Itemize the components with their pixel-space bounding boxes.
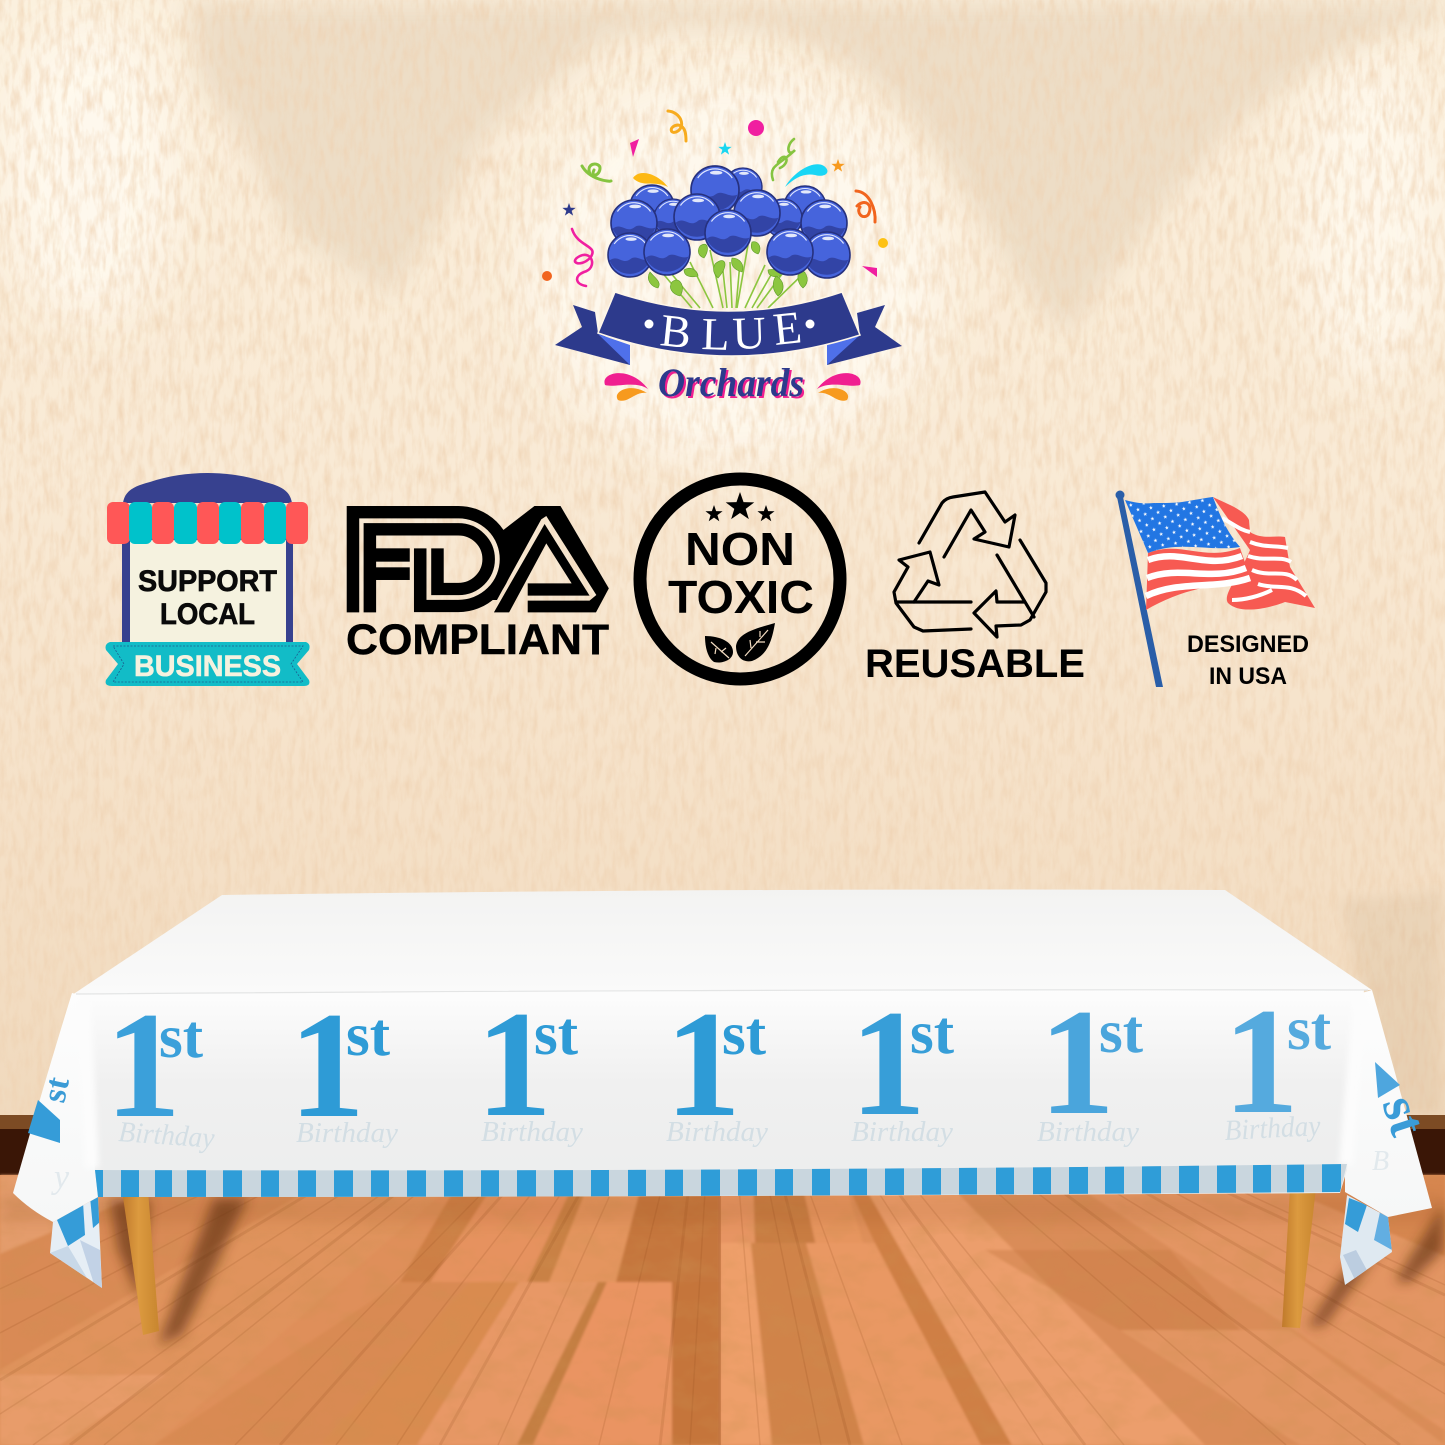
cloth corner underside left [50,1197,102,1288]
FDA logo [353,506,609,612]
store body [122,530,293,650]
Birthday script labels: Birthday [296,1117,398,1149]
floor wood grain [0,1175,1445,1445]
wooden floor [0,1175,1445,1445]
right side cloth print: st [1371,1089,1437,1143]
business ribbon [106,642,310,686]
designed text [1187,631,1309,690]
Orchards script: Orchards [658,360,804,405]
right side cloth print [1371,1062,1437,1177]
left side cloth print [28,1073,77,1196]
badge: support local business [106,473,310,686]
print 4: st [722,1001,767,1068]
1st Birthday prints [105,977,1332,1149]
flag pole [1116,490,1163,687]
print 7 [1223,977,1332,1145]
table top surface [72,890,1372,995]
print 3: st [534,1001,579,1068]
table leg left [122,1190,159,1335]
leaves [705,623,775,663]
flag front stripes [1146,548,1252,610]
ribbon banner: BLUE [658,301,804,360]
badge: non toxic [640,479,840,679]
flag back section [1213,497,1315,610]
Birthday script labels: Birthday [851,1116,953,1148]
leg shadows [110,1198,1443,1345]
designed text: DESIGNED [1187,631,1309,658]
print 4: 1 [665,980,741,1148]
logo: Blue Orchards [542,111,902,407]
badge: FDA compliant [346,506,609,664]
cloth front panel [80,990,1364,1197]
tablecloth [13,890,1437,1288]
compliant text: COMPLIANT [346,616,609,664]
ribbon banner [555,292,902,365]
recycle symbol [894,492,1046,637]
Birthday script labels: Birthday [118,1116,216,1155]
print 7: 1 [1223,977,1299,1145]
non toxic text: TOXIC [668,571,814,623]
print 6: 1 [1039,978,1115,1146]
striped border [95,1164,1347,1197]
print 6: st [1099,999,1144,1066]
store roof [123,473,292,503]
badge: reusable [865,492,1085,686]
baseboard [0,1115,1445,1176]
print 1: 1 [105,981,181,1149]
Orchards script: Orchards [660,362,806,407]
print 1: st [159,1004,204,1071]
left side cloth print: st [36,1073,77,1106]
table leg right [1282,1188,1316,1328]
badge: designed in USA [1116,490,1315,690]
print 5: 1 [850,979,926,1147]
store text: SUPPORT [138,565,277,598]
striped awning [107,502,308,544]
Birthday script labels: Birthday [1037,1116,1139,1148]
store text: LOCAL [160,598,255,631]
cloth right drop [1345,990,1432,1217]
non toxic text: NON [685,523,795,575]
reusable text: REUSABLE [865,642,1085,686]
Birthday script labels: Birthday [1224,1110,1321,1147]
Birthday script labels [118,1110,1321,1155]
right side cloth print: B [1372,1146,1389,1177]
Birthday script labels: Birthday [481,1116,583,1148]
blueberries [608,166,850,278]
floor planks right [720,1175,1445,1445]
flag canton [1125,497,1240,553]
left side cloth print: y [51,1159,70,1196]
print 2: st [346,1002,391,1069]
print 3: 1 [476,980,552,1148]
Birthday script labels: Birthday [666,1116,768,1148]
swooshes [604,373,861,401]
print 2: 1 [289,981,365,1149]
confetti [542,111,888,286]
floor planks left [0,1175,720,1445]
non toxic text [668,523,814,623]
ring [640,479,840,679]
cloth corner underside right [1340,1195,1392,1285]
designed text: IN USA [1209,663,1287,690]
print 7: st [1287,996,1332,1063]
store text [138,565,277,631]
wall background [0,0,1445,1120]
print 5: st [910,1000,955,1067]
green stems and leaves [648,242,807,308]
business ribbon: BUSINESS [134,650,281,683]
cloth left drop [13,993,100,1222]
stars [705,492,775,521]
